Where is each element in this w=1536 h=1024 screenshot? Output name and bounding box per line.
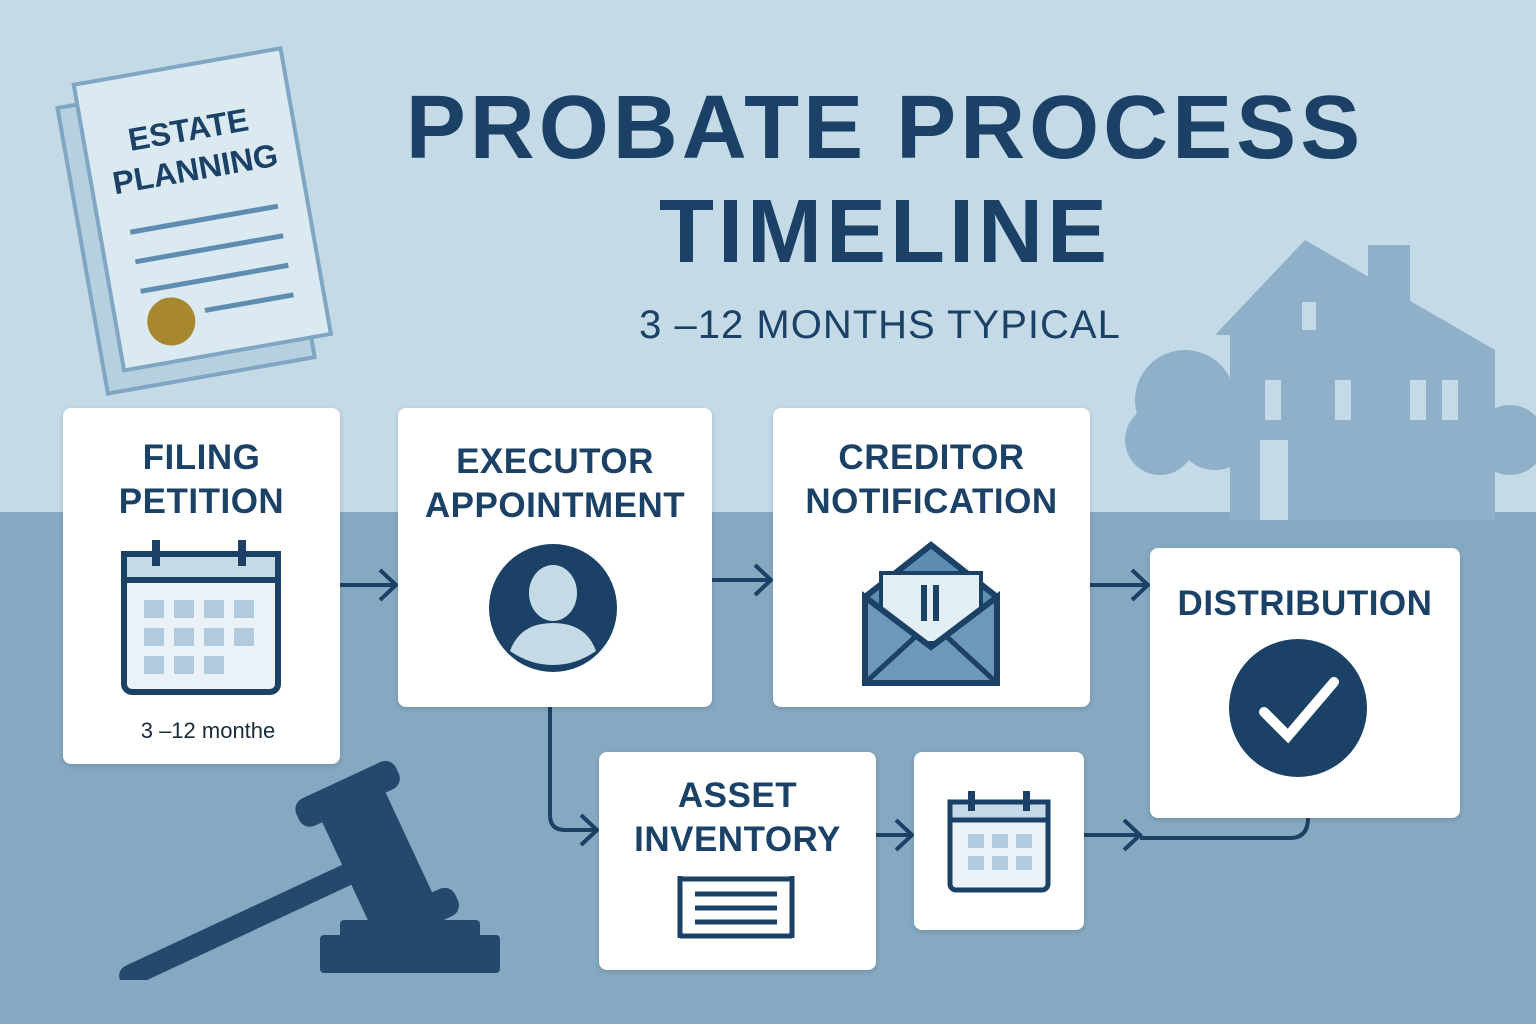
duration label: 3 –12 monthe (141, 718, 275, 743)
panel: filing petition: FILING (143, 438, 260, 477)
panel: filing petition (63, 408, 340, 764)
title: TIMELINE (659, 182, 1111, 282)
panel: creditor notification: CREDITOR (838, 438, 1025, 477)
estate planning document icon (55, 46, 334, 396)
panel: distribution: DISTRIBUTION (1178, 584, 1432, 623)
icon: check (1229, 639, 1367, 777)
panel: creditor notification (773, 408, 1090, 707)
gavel icon (119, 761, 500, 980)
panel: filing petition: PETITION (119, 482, 284, 521)
panel: executor appointment: APPOINTMENT (425, 486, 685, 525)
title: PROBATE PROCESS (406, 78, 1364, 178)
estate planning document icon: PLANNING (110, 137, 281, 201)
panel: creditor notification: NOTIFICATION (805, 482, 1058, 521)
panel: small calendar (914, 752, 1084, 930)
panel: asset inventory: ASSET (678, 776, 797, 815)
icon: calendar (948, 791, 1050, 892)
panel: distribution (1150, 548, 1460, 818)
icon: calendar (121, 540, 281, 695)
icon: envelope (862, 541, 1000, 686)
panel: executor appointment: EXECUTOR (456, 442, 654, 481)
panel: asset inventory: INVENTORY (634, 820, 841, 859)
estate planning document icon: ESTATE (125, 101, 251, 158)
house silhouette (1125, 240, 1536, 520)
subtitle: 3 –12 MONTHS TYPICAL (639, 303, 1121, 347)
icon: list (678, 876, 794, 938)
title (406, 78, 1364, 282)
icon: person (489, 544, 617, 672)
panel: asset inventory (599, 752, 876, 970)
panel: executor appointment (398, 408, 712, 707)
